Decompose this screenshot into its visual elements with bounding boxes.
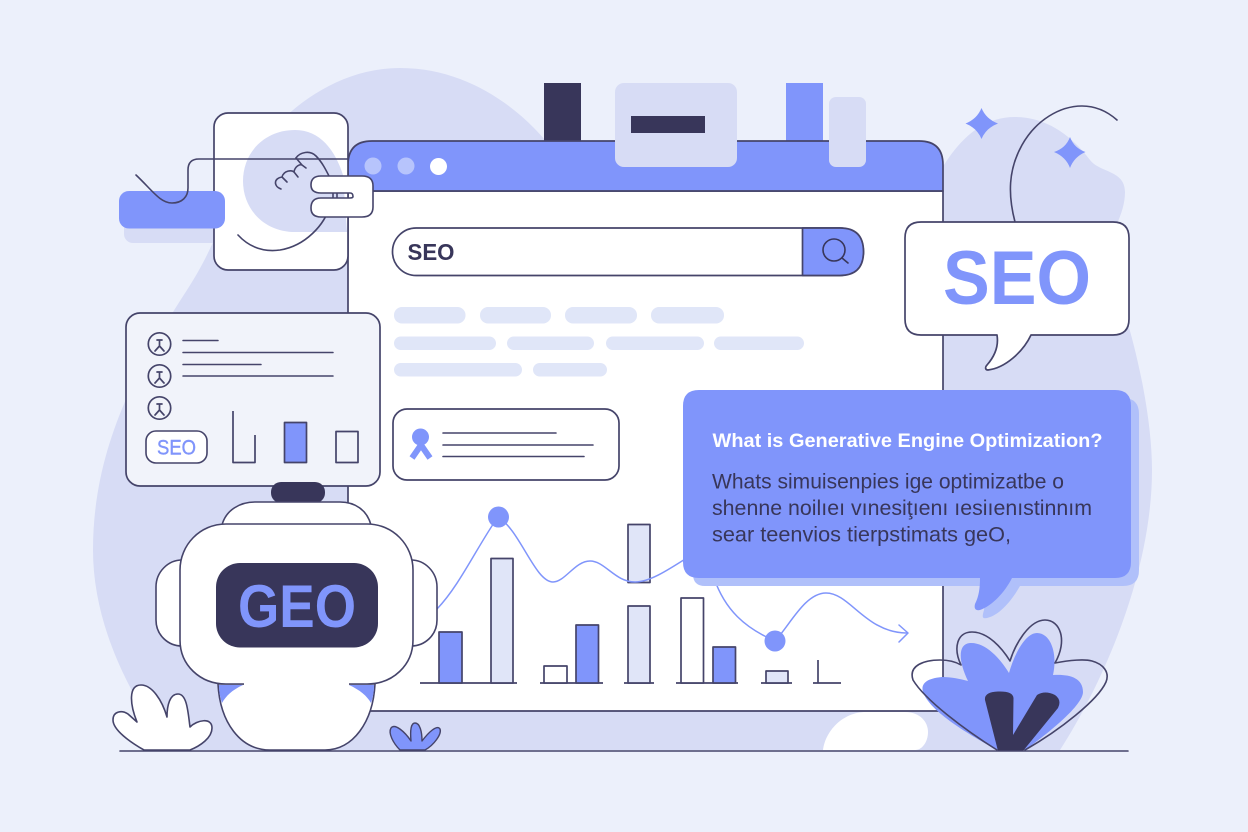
callout body <box>683 390 1131 610</box>
decorative arc <box>1010 106 1117 222</box>
blue pill shadow <box>124 205 234 243</box>
small blue plant <box>390 723 440 750</box>
result lines <box>443 433 593 456</box>
callout body text: Whats simuisenpies ige optimizatbe o <box>712 470 1064 494</box>
search query: SEO <box>408 239 454 265</box>
left top card <box>214 113 348 270</box>
GEO label: GEO <box>238 573 356 640</box>
search bar <box>392 228 864 276</box>
robot body <box>218 684 375 750</box>
left white plant <box>113 685 212 750</box>
robot screen <box>216 563 378 648</box>
callout shadow <box>693 398 1139 618</box>
callout body text: shenne noilıeı vınesiţıenı ıesiıenıstinnım <box>712 497 1092 520</box>
plant dark leaves <box>985 691 1059 751</box>
connector wire <box>136 159 348 203</box>
callout heading: What is Generative Engine Optimization? <box>712 431 1102 452</box>
icon: person badges <box>148 333 171 419</box>
panel text lines <box>183 340 333 376</box>
robot head <box>180 524 413 684</box>
icon: sparkle large <box>966 108 998 139</box>
placeholder text pills <box>394 307 804 376</box>
SEO speech bubble <box>905 222 1129 370</box>
callout: GEO definition <box>683 390 1139 618</box>
card circle <box>243 130 347 232</box>
SEO badge <box>146 431 207 463</box>
robot <box>156 482 437 750</box>
bar chart <box>420 524 841 683</box>
SEO badge: SEO <box>157 436 196 460</box>
tab: blue block <box>786 83 823 143</box>
tab: dark block <box>544 83 581 143</box>
trend line with markers <box>437 506 908 652</box>
robot neck <box>271 482 325 503</box>
robot ears <box>156 560 437 646</box>
plant outline <box>912 620 1107 750</box>
tab: light panel with dark bar <box>615 83 737 167</box>
icon: hand outline <box>238 152 330 250</box>
right plant <box>912 620 1107 751</box>
left data panel <box>126 313 380 486</box>
blue pill <box>119 191 225 228</box>
browser window <box>348 141 943 711</box>
window dots <box>364 158 447 175</box>
browser header bar <box>348 141 943 191</box>
callout body text: sear teenvios tierpstimats geO, <box>712 524 1011 546</box>
icon: magnifier <box>823 239 848 263</box>
robot shoulder accents <box>219 685 374 703</box>
icon: sparkle small <box>1054 137 1086 168</box>
ground line <box>120 750 1128 752</box>
white mound <box>823 712 928 750</box>
plant blue leaves <box>922 633 1083 750</box>
mini bar chart <box>233 411 358 462</box>
tab: light small panel <box>829 97 866 167</box>
search button <box>802 228 864 276</box>
icon: ribbon <box>412 428 430 458</box>
SEO bubble text: SEO <box>943 236 1091 321</box>
callout body text <box>712 470 1092 546</box>
icon: finger clip <box>311 176 373 217</box>
result card <box>393 409 619 480</box>
robot head top <box>222 502 371 525</box>
background blob <box>93 68 1152 750</box>
head opening over body <box>244 680 349 688</box>
